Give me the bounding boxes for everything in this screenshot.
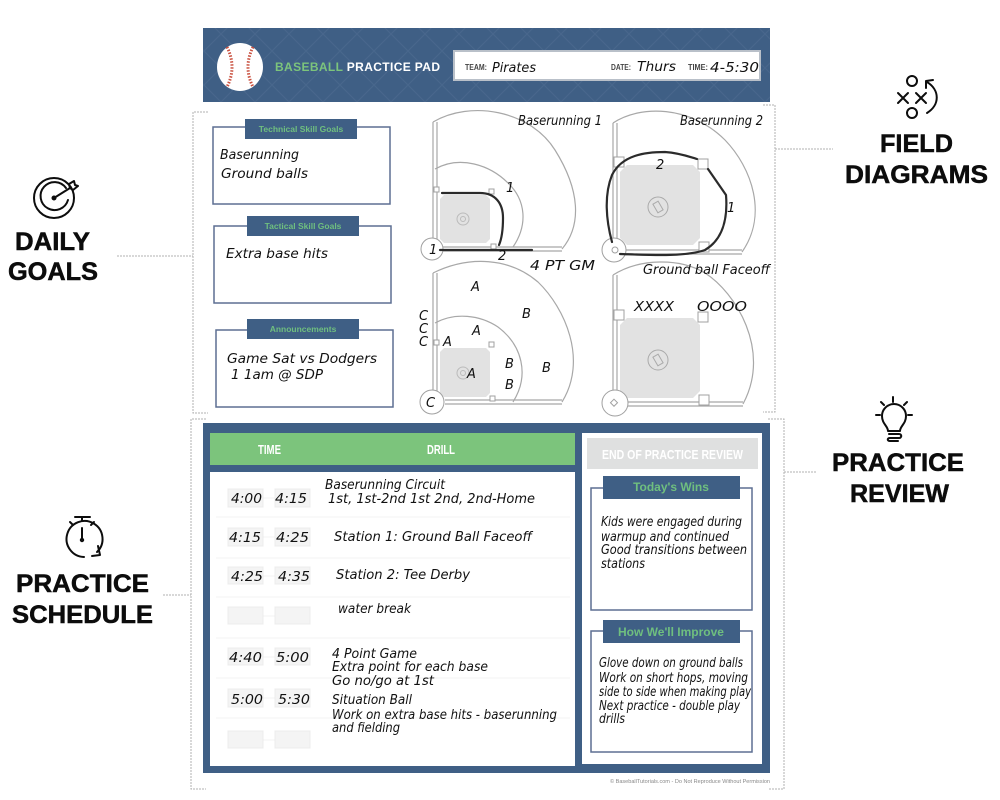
panel: announcements: [216, 319, 393, 407]
schedule table: Go no/go at 1st: [332, 674, 435, 689]
box: today's wins: Good transitions between: [601, 543, 747, 558]
field diagram: 4 point game: C: [426, 396, 436, 411]
field diagram: baserunning 2: 1: [727, 201, 735, 216]
schedule table: Station 1: Ground Ball Faceoff: [334, 530, 534, 545]
panel: tactical skill goals: [214, 216, 391, 303]
schedule table: 4:00: [231, 492, 262, 507]
team, date and time box: Pirates: [492, 61, 536, 76]
schedule table: Work on extra base hits - baserunning: [332, 708, 557, 723]
box: how we'll improve: How We'll Improve: [618, 625, 724, 639]
field diagram: ground ball faceoff: [602, 262, 772, 416]
field diagram: baserunning 1: Baserunning 1: [518, 114, 602, 129]
box: today's wins: Kids were engaged during: [601, 515, 742, 530]
box: how we'll improve: Next practice - double play: [599, 699, 740, 714]
field diagram: 4 point game: C: [419, 322, 429, 337]
schedule header: [210, 433, 575, 465]
schedule table: 5:30: [278, 693, 310, 708]
icon: baseball: [217, 43, 263, 91]
panel: announcements: Game Sat vs Dodgers: [227, 352, 377, 367]
field diagram: 4 point game: B: [505, 378, 514, 393]
panel: technical skill goals: Ground balls: [221, 167, 308, 182]
field diagram: 4 point game: A: [471, 324, 481, 339]
panel: practice schedule: [203, 423, 770, 773]
schedule table: 4 Point Game: [332, 647, 417, 662]
label: daily goals: GOALS: [8, 258, 98, 286]
icon: play diagram: [898, 76, 937, 118]
team, date and time box: Thurs: [637, 60, 676, 75]
box: today's wins: [591, 476, 752, 610]
header title: BASEBALL PRACTICE PAD: [275, 60, 440, 74]
field diagram: baserunning 2: 2: [656, 158, 664, 173]
field diagram: baserunning 1: 1: [429, 243, 437, 258]
team, date and time box: TIME:: [688, 63, 708, 72]
box: how we'll improve: drills: [599, 712, 625, 727]
header banner: [203, 28, 770, 102]
team, date and time box: DATE:: [611, 63, 631, 72]
panel: tactical skill goals: Tactical Skill Goals: [265, 221, 342, 231]
bracket: daily goals: [117, 112, 208, 413]
copyright: © BaseballTutorials.com - Do Not Reproduce Without Permission: [610, 778, 770, 785]
panel: technical skill goals: Technical Skill Goals: [259, 124, 343, 134]
schedule table: and fielding: [332, 721, 400, 736]
schedule table: Station 2: Tee Derby: [336, 568, 470, 583]
label: field diagrams: FIELD: [880, 130, 953, 158]
panel: technical skill goals: [213, 119, 390, 204]
schedule table: 5:00: [231, 693, 263, 708]
schedule table: 1st, 1st-2nd 1st 2nd, 2nd-Home: [328, 492, 535, 507]
bracket: field diagrams: [763, 105, 833, 412]
field diagram: baserunning 1: 2: [498, 249, 506, 264]
schedule table: 4:40: [229, 651, 262, 666]
label: field diagrams: [845, 76, 988, 189]
icon: stopwatch: [67, 517, 103, 557]
field diagram: 4 point game: C: [419, 335, 429, 350]
schedule table: 4:25: [276, 531, 309, 546]
field diagram: baserunning 2: [602, 111, 763, 262]
panel: announcements: Announcements: [270, 324, 337, 334]
panel: technical skill goals: Baserunning: [220, 148, 299, 163]
team, date and time box: [454, 51, 760, 80]
field diagram: 4 point game: B: [505, 357, 514, 372]
schedule table: 4:35: [278, 570, 310, 585]
panel: end of practice review: [582, 433, 762, 764]
box: today's wins: Today's Wins: [633, 480, 709, 494]
box: today's wins: warmup and continued: [601, 530, 730, 545]
label: practice schedule: [12, 517, 153, 629]
field diagram: baserunning 2: Baserunning 2: [680, 114, 763, 129]
bracket: practice review: [768, 419, 817, 789]
schedule header: DRILL: [427, 442, 455, 457]
team, date and time box: 4-5:30: [710, 61, 759, 76]
schedule table: Baserunning Circuit: [325, 478, 446, 493]
label: practice review: PRACTICE: [832, 449, 964, 477]
schedule table: 5:00: [276, 651, 309, 666]
schedule table: 4:15: [275, 492, 307, 507]
label: daily goals: [8, 178, 98, 286]
field diagram: 4 point game: B: [522, 307, 531, 322]
field diagram: 4 point game: B: [542, 361, 551, 376]
schedule header: TIME: [258, 442, 281, 457]
field diagram: ground ball faceoff: OOOO: [697, 300, 747, 315]
label: practice schedule: PRACTICE: [16, 570, 149, 598]
field diagram: 4 point game: A: [470, 280, 480, 295]
box: how we'll improve: side to side when making play: [599, 685, 751, 700]
schedule table: [210, 472, 575, 766]
schedule table: 4:15: [229, 531, 261, 546]
panel: tactical skill goals: Extra base hits: [226, 247, 328, 262]
label: practice review: REVIEW: [850, 480, 949, 508]
box: how we'll improve: Work on short hops, moving: [599, 671, 748, 686]
label: field diagrams: DIAGRAMS: [845, 161, 988, 189]
label: practice schedule: SCHEDULE: [12, 601, 153, 629]
field diagram: baserunning 1: 1: [506, 181, 514, 196]
field diagram: 4 point game: A: [442, 335, 452, 350]
schedule table: Situation Ball: [332, 693, 412, 708]
review heading: END OF PRACTICE REVIEW: [602, 447, 744, 462]
field diagram: 4 point game: C: [419, 309, 429, 324]
team, date and time box: TEAM:: [465, 63, 487, 72]
field diagram: 4 point game: A: [466, 367, 476, 382]
review heading: [587, 438, 758, 469]
label: daily goals: DAILY: [15, 228, 90, 256]
label: practice review: [832, 397, 964, 508]
field diagram: 4 point game: 4 PT GM: [530, 259, 595, 274]
icon: target: [34, 178, 78, 218]
box: how we'll improve: Glove down on ground balls: [599, 656, 743, 671]
schedule table: Extra point for each base: [332, 660, 488, 675]
box: how we'll improve: [591, 620, 752, 752]
field diagram: 4 point game: [419, 259, 595, 414]
schedule table: water break: [338, 602, 411, 617]
field diagram: baserunning 1: [421, 111, 602, 264]
bracket: practice schedule: [163, 419, 206, 789]
panel: announcements: 1 1am @ SDP: [231, 368, 323, 383]
field diagram: ground ball faceoff: XXXX: [633, 300, 675, 315]
box: today's wins: stations: [601, 557, 645, 572]
icon: light bulb: [876, 397, 912, 441]
schedule table: 4:25: [231, 570, 263, 585]
field diagram: ground ball faceoff: Ground ball Faceoff: [643, 263, 772, 278]
